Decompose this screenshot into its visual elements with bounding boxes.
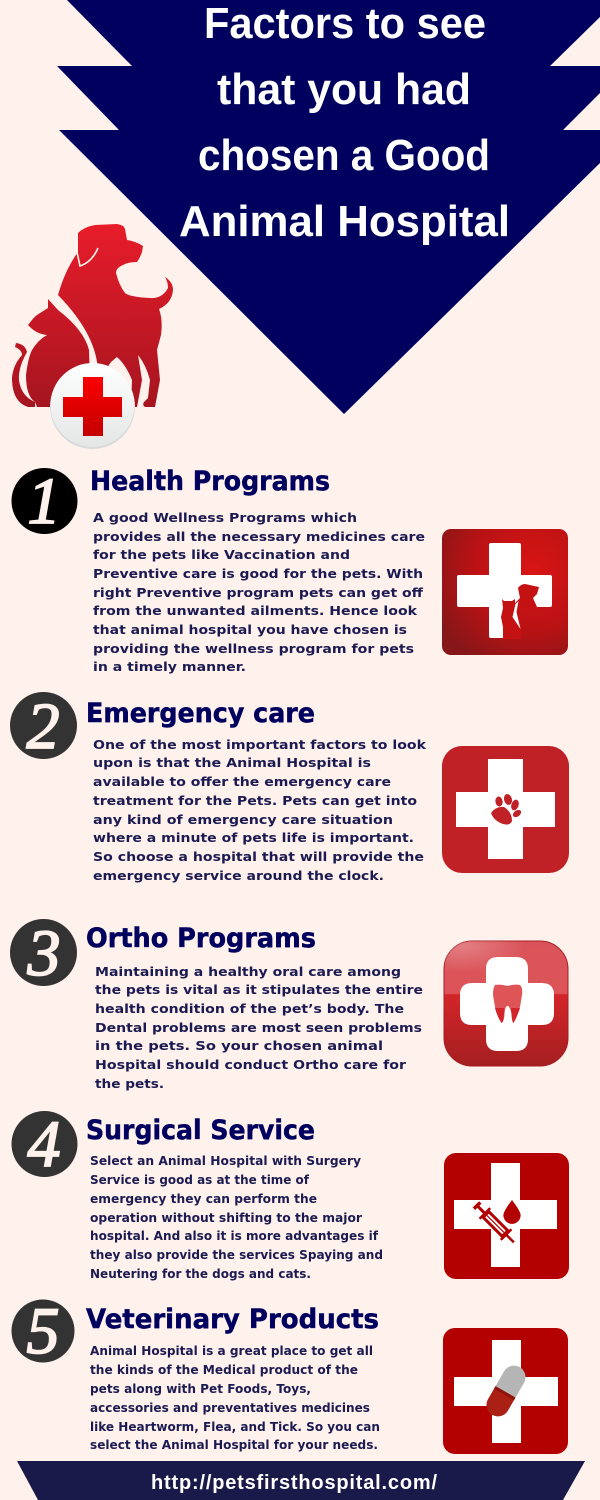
- icon: cross with tooth: [444, 941, 568, 1066]
- number badge 3: [10, 917, 77, 990]
- body text 4: Select an Animal Hospital with Surgery: [90, 1153, 361, 1168]
- body text 2: So choose a hospital that will provide the: [93, 849, 424, 864]
- heading 5: Veterinary Products: [86, 1304, 379, 1335]
- icon: cross with paw: [442, 746, 569, 873]
- body text 2: any kind of emergency care situation: [93, 812, 393, 827]
- body text 1: that animal hospital you have chosen is: [93, 622, 407, 637]
- body text 1: right Preventive program pets can get off: [93, 585, 424, 600]
- body text 5: accessories and preventatives medicines: [90, 1400, 370, 1415]
- body text 4: emergency they can perform the: [90, 1191, 317, 1206]
- heading 3: Ortho Programs: [86, 923, 316, 954]
- title: Animal Hospital: [179, 197, 510, 246]
- number badge 5: 5: [26, 1295, 60, 1368]
- section 1: Health Programs: [12, 465, 568, 674]
- body text 3: the pets is vital as it stipulates the entire: [95, 982, 423, 997]
- body text 4: operation without shifting to the major: [90, 1210, 363, 1225]
- icon: cross with syringe and drop: [444, 1153, 569, 1279]
- body text 5: like Heartworm, Flea, and Tick. So you can: [90, 1419, 380, 1434]
- body text 3: [95, 964, 423, 1091]
- number badge 4: 4: [28, 1108, 60, 1181]
- title banner: [57, 0, 600, 414]
- heading 2: Emergency care: [86, 698, 315, 729]
- title: [179, 0, 510, 246]
- body text 3: health condition of the pet’s body. The: [95, 1001, 404, 1016]
- number badge 4: [12, 1108, 78, 1181]
- body text 2: where a minute of pets life is important.: [93, 830, 414, 845]
- title: chosen a Good: [198, 131, 490, 180]
- footer url: http://petsfirsthospital.com/: [151, 1472, 437, 1494]
- body text 4: they also provide the services Spaying and: [90, 1247, 383, 1262]
- icon: dog and cat with medical cross: [12, 224, 173, 449]
- icon: round cross badge: [50, 363, 135, 449]
- body text 3: Maintaining a healthy oral care among: [95, 964, 401, 979]
- number badge 1: 1: [28, 465, 60, 538]
- body text 2: [93, 737, 427, 883]
- body text 3: the pets.: [95, 1076, 164, 1091]
- body text 5: the kinds of the Medical product of the: [90, 1362, 358, 1377]
- body text 1: Preventive care is good for the pets. With: [93, 566, 423, 581]
- icon: cross with capsule: [443, 1328, 568, 1454]
- body text 4: [90, 1153, 383, 1281]
- heading 4: Surgical Service: [86, 1115, 315, 1146]
- title: Factors to see: [204, 0, 486, 48]
- body text 1: providing the wellness program for pets: [93, 641, 414, 656]
- body text 5: select the Animal Hospital for your needs.: [90, 1437, 378, 1452]
- body text 5: [90, 1343, 380, 1452]
- body text 1: in a timely manner.: [93, 659, 246, 674]
- body text 1: A good Wellness Programs which: [93, 510, 357, 525]
- body text 1: for the pets like Vaccination and: [93, 547, 350, 562]
- body text 2: upon is that the Animal Hospital is: [93, 755, 371, 770]
- number badge 5: [12, 1295, 74, 1368]
- body text 3: Dental problems are most seen problems: [95, 1020, 422, 1035]
- section 5: Veterinary Products: [12, 1295, 568, 1454]
- body text 1: [93, 510, 425, 674]
- body text 5: pets along with Pet Foods, Toys,: [90, 1381, 311, 1396]
- section 2: Emergency care: [10, 690, 569, 883]
- heading 1: Health Programs: [90, 466, 330, 497]
- body text 4: Neutering for the dogs and cats.: [90, 1266, 311, 1281]
- footer banner: [17, 1461, 585, 1500]
- number badge 2: 2: [26, 690, 60, 763]
- section 3: Ortho Programs: [10, 917, 568, 1091]
- body text 4: Service is good as at the time of: [90, 1172, 310, 1187]
- body text 5: Animal Hospital is a great place to get all: [90, 1343, 373, 1358]
- title: that you had: [217, 65, 471, 114]
- number badge 3: 3: [26, 917, 60, 990]
- body text 1: provides all the necessary medicines care: [93, 529, 425, 544]
- icon: cross with pets: [442, 529, 568, 655]
- body text 3: in the pets. So your chosen animal: [95, 1038, 383, 1053]
- body text 2: One of the most important factors to look: [93, 737, 427, 752]
- number badge 1: [12, 465, 78, 538]
- body text 2: emergency service around the clock.: [93, 868, 384, 883]
- body text 4: hospital. And also it is more advantages if: [90, 1228, 379, 1243]
- section 4: Surgical Service: [12, 1108, 569, 1281]
- body text 3: Hospital should conduct Ortho care for: [95, 1057, 407, 1072]
- body text 2: treatment for the Pets. Pets can get into: [93, 793, 417, 808]
- number badge 2: [10, 690, 77, 763]
- body text 1: from the unwanted ailments. Hence look: [93, 603, 418, 618]
- body text 2: available to offer the emergency care: [93, 774, 391, 789]
